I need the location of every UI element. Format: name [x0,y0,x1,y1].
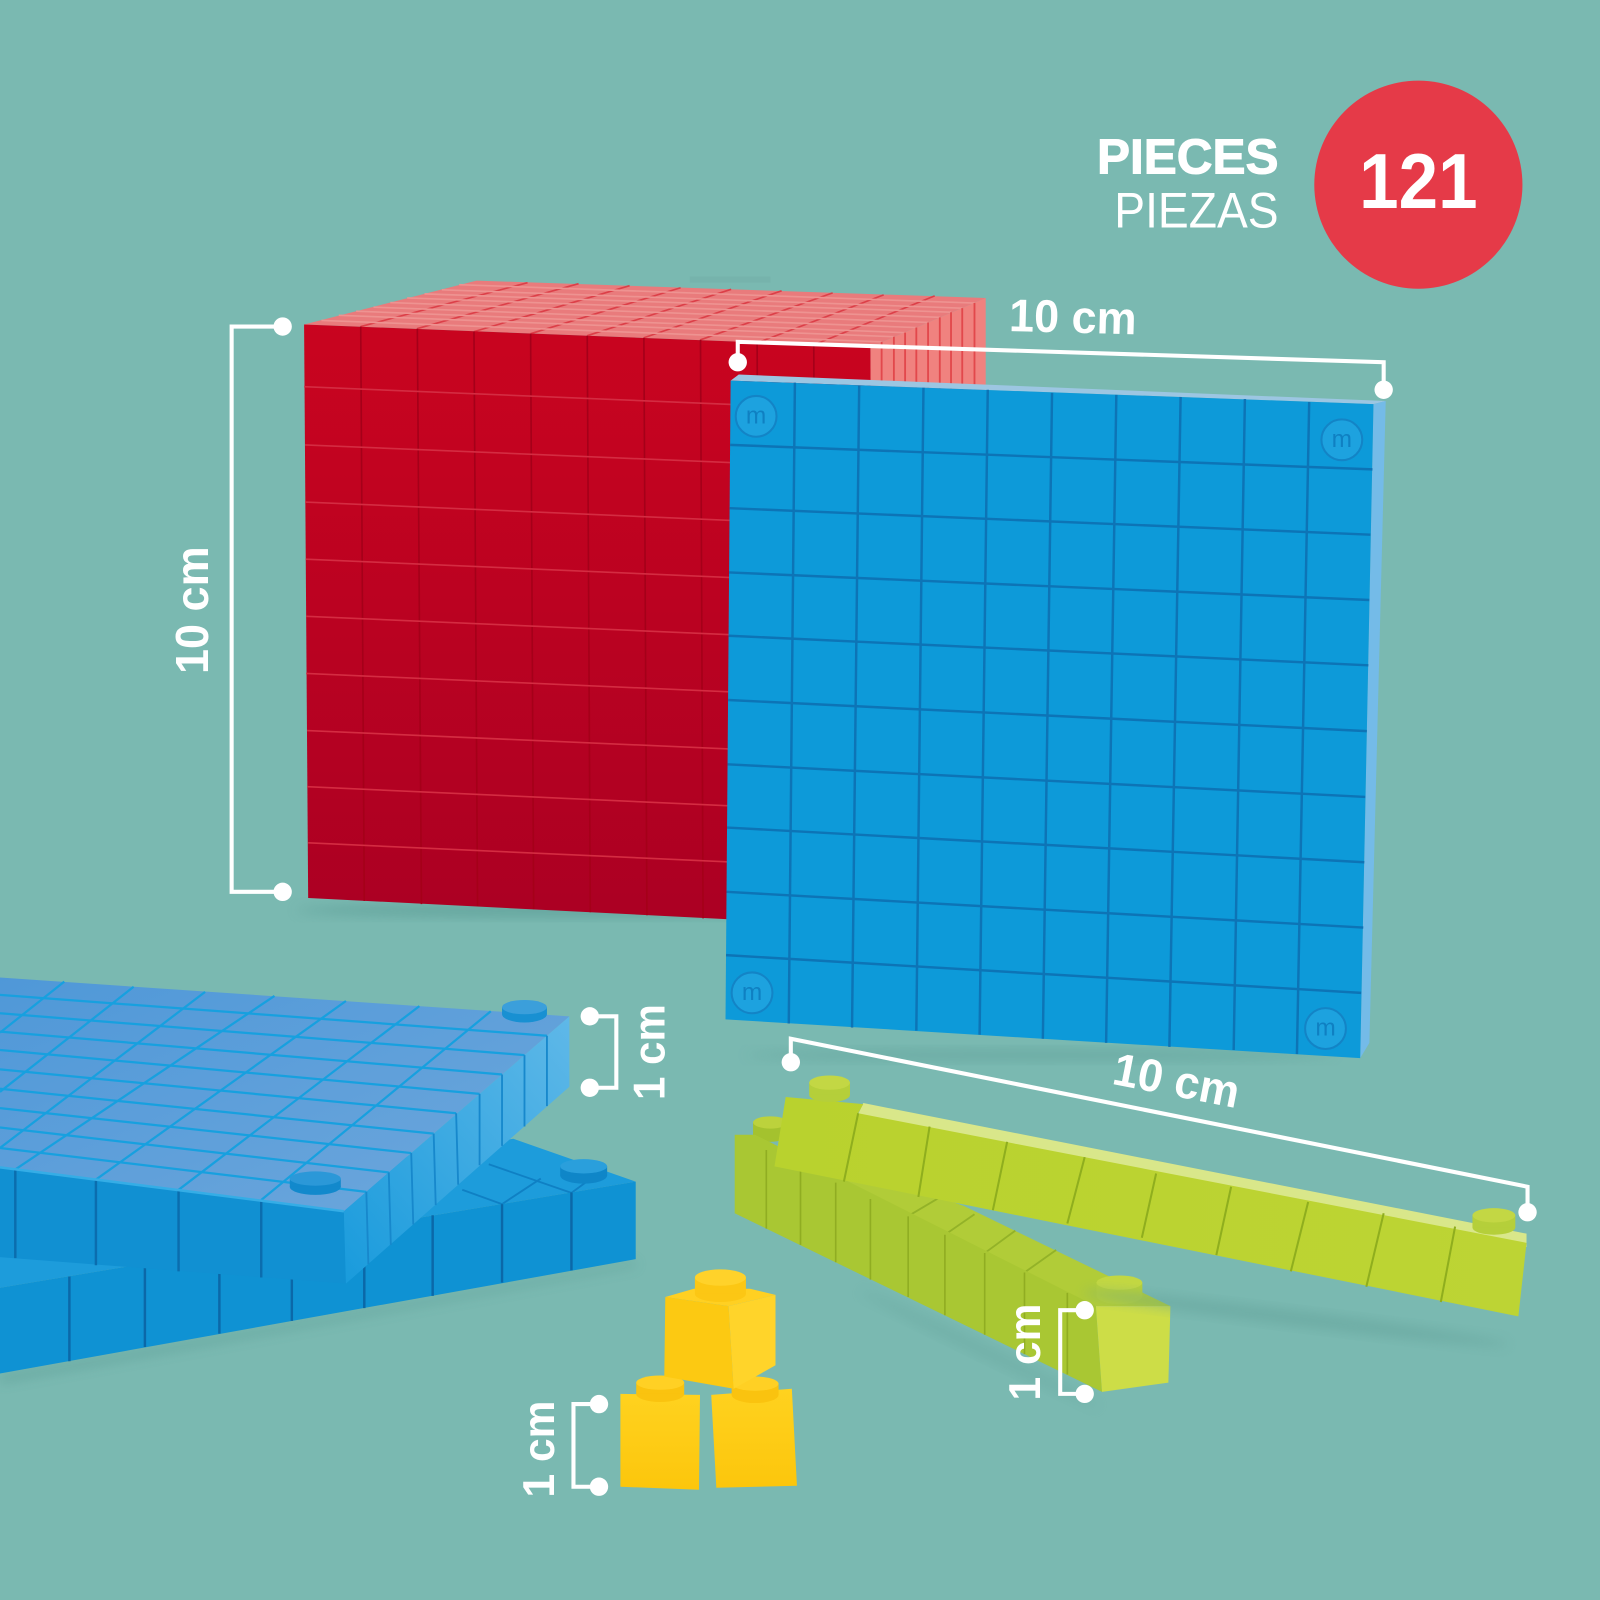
dimension: rod thickness 1 cm [999,1301,1094,1403]
icon: logo studs: m [742,979,762,1006]
lower plate top surface [0,1139,636,1288]
right yellow cube [711,1377,797,1488]
dimension: cube height 10 cm: 10 cm [166,546,218,674]
blue hundred plate, upper tilted [0,978,569,1284]
rod end stud [1096,1276,1142,1304]
rod end face [1096,1306,1170,1392]
dimension: rod thickness 1 cm: 1 cm [999,1304,1050,1401]
dimension: unit cube 1 cm [513,1395,608,1497]
lower plate front face [0,1182,636,1373]
yellow unit cubes [620,1269,797,1490]
rod top facet [858,1103,1527,1247]
upper plate back stud [502,1000,547,1022]
green ten rod, upper [774,1076,1527,1352]
red thousand cube [296,277,986,927]
top yellow cube [664,1269,776,1389]
pieces label [1097,130,1279,239]
rod side face [735,1135,1102,1392]
pieces label: PIEZAS [1114,183,1279,239]
cube right face [870,298,986,429]
badge: 121 pieces: 121 [1359,139,1478,225]
left yellow cube [620,1376,700,1490]
upper plate side face [344,1016,569,1284]
dimension: cube height 10 cm [166,317,292,901]
cube front face [304,324,872,927]
icon: logo studs [732,396,1362,1049]
blue hundred plate, upright [726,374,1386,1060]
rod stud right [1472,1208,1515,1235]
dimension: plate width top 10 cm: 10 cm [1008,289,1137,344]
upper plate front face [0,1167,346,1284]
rod top surface [816,1153,1170,1306]
dimension: rod length 10 cm: 10 cm [1109,1043,1244,1118]
dimension: plate thickness 1 cm [581,1004,674,1100]
rod front face [774,1097,1527,1316]
cube top face [304,281,986,347]
dimension: plate thickness 1 cm: 1 cm [623,1004,674,1100]
blue hundred plate, lower [0,1139,636,1382]
plate front face [726,381,1373,1058]
icon: logo studs: m [1315,1015,1336,1042]
green ten rod, lower [735,1116,1170,1413]
badge: 121 pieces [1314,81,1522,289]
lower plate stud [560,1159,607,1184]
pieces label: PIECES [1097,130,1279,184]
upper plate front stud [290,1171,341,1195]
dimension: rod length 10 cm [782,1039,1537,1221]
dimension: plate width top 10 cm [729,289,1393,399]
icon: logo studs: m [746,402,766,429]
upper plate top surface [0,978,569,1211]
plate right edge [1360,401,1386,1058]
icon: logo studs: m [1332,426,1352,453]
plate top edge [731,374,1386,404]
far stud [753,1116,788,1142]
dimension: unit cube 1 cm: 1 cm [513,1401,564,1497]
rod stud left [809,1076,850,1102]
